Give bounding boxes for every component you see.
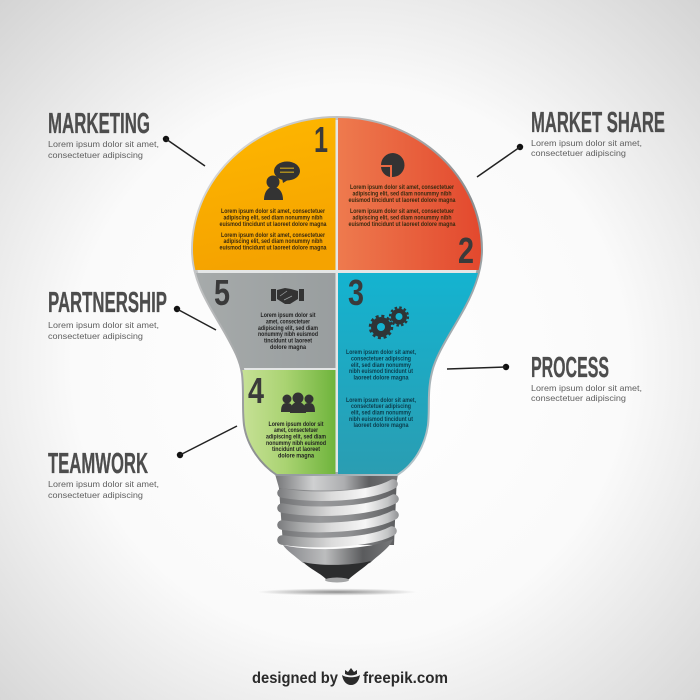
text: grey segment: dolore magna xyxy=(270,345,307,351)
number 1: 1 xyxy=(314,119,328,160)
panel: grey segment xyxy=(185,273,336,368)
text: orange segment: euismod tincidunt ut laoreet dolore magna xyxy=(220,222,327,228)
panel: green segment xyxy=(235,370,336,474)
text: process description: Lorem ipsum dolor sit amet, xyxy=(531,383,642,393)
icon: ground shadow xyxy=(257,588,417,596)
text: blue segment: Lorem ipsum dolor sit amet, xyxy=(346,398,416,404)
screw threads xyxy=(282,484,394,543)
text: green segment xyxy=(266,422,326,460)
icon: pie chart xyxy=(381,153,405,177)
text: red segment: Lorem ipsum dolor sit amet, consectetuer xyxy=(350,209,455,215)
footer credit xyxy=(252,668,448,687)
text: red segment xyxy=(348,185,456,228)
text: green segment: tincidunt ut laoreet xyxy=(272,447,320,453)
bulb segments xyxy=(185,110,488,474)
connector: teamwork xyxy=(177,426,237,458)
icon: gears xyxy=(370,308,408,338)
text: blue segment: Lorem ipsum dolor sit amet, xyxy=(346,350,416,356)
panel: market share label xyxy=(477,107,665,177)
text: green segment: nonummy nibh euismod xyxy=(266,441,326,447)
text: blue segment: elit, sed diam nonummy xyxy=(351,410,412,416)
text: grey segment: Lorem ipsum dolor sit xyxy=(260,313,316,319)
panel: orange segment xyxy=(193,118,336,270)
text: red segment: euismod tincidunt ut laoreet dolore magna xyxy=(348,198,456,204)
text: red segment: adipiscing elit, sed diam nonummy nibh xyxy=(352,216,452,222)
gear large xyxy=(370,316,392,338)
text: green segment: Lorem ipsum dolor sit xyxy=(268,422,324,428)
text: green segment: dolore magna xyxy=(278,454,315,460)
heading: process: PROCESS xyxy=(531,352,609,384)
icon: person with speech bubble xyxy=(264,162,300,200)
text: green segment: adipiscing elit, sed diam xyxy=(266,434,326,440)
connector: process xyxy=(447,364,509,370)
heading: marketing: MARKETING xyxy=(48,108,150,140)
panel: partnership label: consectetuer adipiscing xyxy=(48,331,143,341)
text: red segment: Lorem ipsum dolor sit amet, consectetuer xyxy=(350,185,455,191)
text: grey segment xyxy=(258,313,318,351)
footer credit: designed by xyxy=(252,670,338,687)
number 3: 3 xyxy=(348,272,364,313)
panel: process label xyxy=(447,352,642,403)
text: blue segment: elit, sed diam nonummy xyxy=(351,363,412,369)
text: orange segment xyxy=(220,209,327,252)
base collar xyxy=(275,474,398,490)
panel: marketing label: consectetuer adipiscing xyxy=(48,150,143,160)
text: blue segment: consectetuer adipiscing xyxy=(351,356,411,362)
panel: marketing label xyxy=(48,108,205,166)
number 5: 5 xyxy=(214,272,230,313)
text: blue segment: laoreet dolore magna xyxy=(354,376,409,382)
text: blue segment: consectetuer adipiscing xyxy=(351,404,411,410)
text: orange segment: Lorem ipsum dolor sit amet, consectetuer xyxy=(221,233,326,239)
panel: process label: consectetuer adipiscing xyxy=(531,393,626,403)
lamp screw base xyxy=(275,474,398,582)
text: orange segment: adipiscing elit, sed diam nonummy nibh xyxy=(224,239,323,245)
text: blue segment: nibh euismod tincidunt ut xyxy=(349,369,413,375)
lightbulb glass xyxy=(185,110,488,474)
base dark tip xyxy=(303,561,371,581)
panel: teamwork label: consectetuer adipiscing xyxy=(48,490,143,500)
heading: teamwork: TEAMWORK xyxy=(48,448,148,480)
connector: market share xyxy=(477,144,523,177)
text: blue segment: nibh euismod tincidunt ut xyxy=(349,417,413,423)
number 2: 2 xyxy=(458,230,474,271)
text: grey segment: amet, consectetuer xyxy=(266,320,311,326)
text: market share description: Lorem ipsum dolor sit amet, xyxy=(531,138,642,148)
connector: partnership xyxy=(174,306,216,330)
bulb rim xyxy=(193,118,481,474)
number 4: 4 xyxy=(248,370,264,411)
text: partnership description: Lorem ipsum dolor sit amet, xyxy=(48,320,159,330)
base contact xyxy=(325,578,349,582)
panel: market share label: consectetuer adipiscing xyxy=(531,148,626,158)
text: grey segment: tincidunt ut laoreet xyxy=(264,338,312,344)
text: red segment: euismod tincidunt ut laoreet dolore magna xyxy=(348,222,456,228)
panel: blue segment xyxy=(338,273,488,474)
heading: partnership: PARTNERSHIP xyxy=(48,287,167,319)
text: blue segment xyxy=(346,350,416,429)
text: marketing description: Lorem ipsum dolor sit amet, xyxy=(48,139,159,149)
text: red segment: adipiscing elit, sed diam nonummy nibh xyxy=(352,192,452,198)
text: orange segment: euismod tincidunt ut laoreet dolore magna xyxy=(220,246,327,252)
connector: marketing xyxy=(163,136,205,166)
icon: freepik logo xyxy=(342,668,360,685)
footer credit: freepik.com xyxy=(363,670,448,687)
text: orange segment: adipiscing elit, sed diam nonummy nibh xyxy=(224,216,323,222)
text: teamwork description: Lorem ipsum dolor sit amet, xyxy=(48,479,159,489)
icon: team of people xyxy=(281,392,315,413)
icon: handshake xyxy=(271,288,304,304)
base lower cone xyxy=(283,539,393,565)
panel: partnership label xyxy=(48,287,216,341)
panel: teamwork label xyxy=(48,426,237,500)
text: grey segment: adipiscing elit, sed diam xyxy=(258,326,318,332)
base body xyxy=(278,474,397,545)
text: grey segment: nonummy nibh euismod xyxy=(258,332,318,338)
panel: red segment xyxy=(338,110,488,270)
gear small xyxy=(390,308,408,326)
text: orange segment: Lorem ipsum dolor sit amet, consectetuer xyxy=(221,209,326,215)
text: green segment: amet, consectetuer xyxy=(274,428,319,434)
text: blue segment: laoreet dolore magna xyxy=(354,423,409,429)
